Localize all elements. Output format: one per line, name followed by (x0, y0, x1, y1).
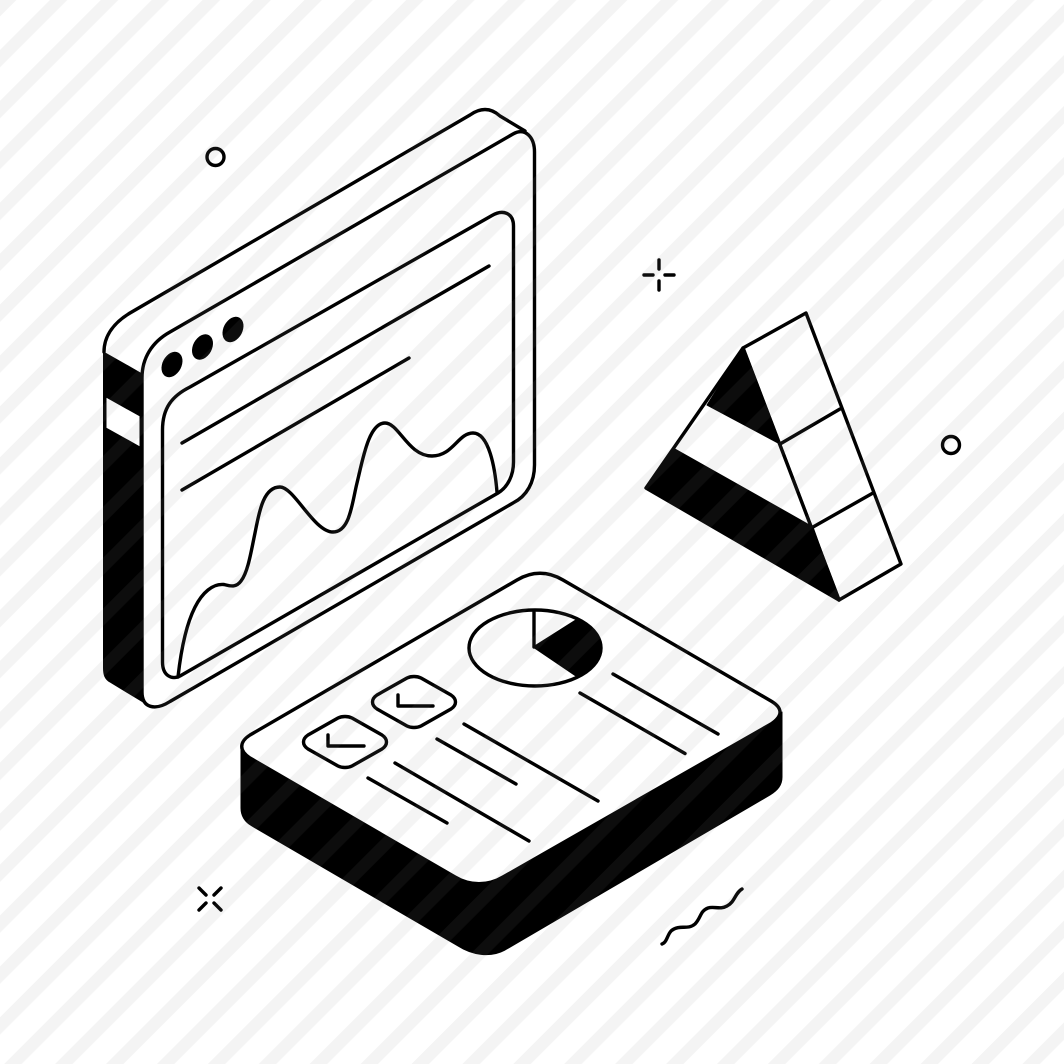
decoration: plus sparkle (644, 260, 674, 290)
pyramid chart (646, 313, 901, 600)
decoration: circle top left (207, 148, 224, 166)
decoration: cross sparkle (199, 888, 221, 910)
decoration: squiggle (662, 889, 742, 944)
heading line long (182, 266, 489, 443)
inner screen (162, 212, 514, 677)
pyramid right divider upper (780, 409, 840, 444)
pyramid bottom black tier (646, 449, 839, 600)
tablet top face (242, 573, 780, 884)
area line chart (178, 423, 497, 677)
pyramid top black tier (707, 348, 780, 444)
window black side face (104, 352, 148, 705)
pyramid left face (646, 348, 839, 600)
decoration: circle right (942, 436, 960, 454)
window front face (142, 132, 534, 707)
pyramid right face (743, 313, 901, 600)
pie chart (469, 610, 601, 686)
text lines by checkboxes (368, 724, 598, 841)
browser window chart panel (104, 110, 534, 707)
window side outline (104, 110, 525, 352)
checkbox lower (304, 716, 386, 768)
checkbox upper (372, 676, 456, 728)
tablet black side (241, 712, 782, 955)
pyramid right divider lower (813, 493, 873, 527)
tablet report panel (241, 573, 782, 955)
window control dots (157, 313, 248, 381)
text lines by pie (580, 674, 718, 754)
heading line short (182, 358, 409, 490)
